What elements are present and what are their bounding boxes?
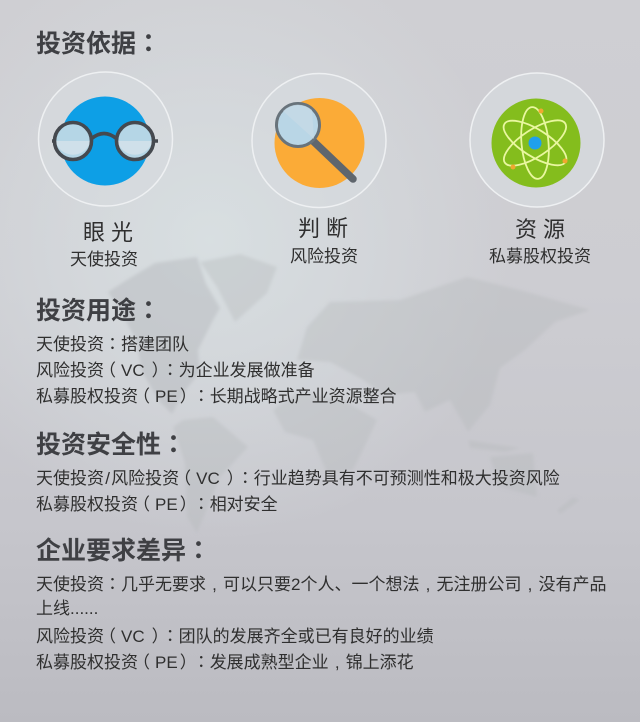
heading: use of funds: 投资用途： (36, 291, 161, 327)
text: company requirements: 天使投资：几乎无要求 可以只要2个人、一个想法 无注册公司 没有产品 (36, 570, 606, 595)
text: company requirements: , (335, 653, 340, 672)
label: vision: 眼 光 (83, 220, 133, 245)
label: judgement: 判 断 (298, 216, 348, 241)
text: use of funds: 私募股权投资（ PE）：长期战略式产业资源整合 (36, 382, 397, 407)
text: company requirements: 私募股权投资（ PE）：发展成熟型企业 锦上添花 (36, 648, 414, 673)
text: safety (36, 464, 560, 515)
label: angel investment: 天使投资 (70, 250, 138, 269)
text: company requirements: , (212, 575, 217, 594)
label: private equity: 私募股权投资 (489, 247, 591, 266)
text: safety: 天使投资/风险投资（ VC ）：行业趋势具有不可预测性和极大投资风险 (36, 464, 560, 489)
text: safety: 私募股权投资（ PE）：相对安全 (36, 490, 278, 515)
text: company requirements: 上线...... (36, 599, 98, 618)
text: company requirements: 风险投资（ VC ）：团队的发展齐全或已有良好的业绩 (36, 622, 434, 647)
heading: basis: 投资依据： (36, 24, 161, 60)
text: use of funds (36, 330, 397, 407)
label: venture capital: 风险投资 (290, 247, 358, 266)
text: company requirements: , (426, 575, 430, 594)
heading: safety: 投资安全性： (36, 425, 186, 461)
text: use of funds: 天使投资：搭建团队 (36, 330, 189, 355)
icon: glasses (38, 71, 174, 207)
text: use of funds: 风险投资（ VC ）：为企业发展做准备 (36, 356, 315, 381)
icon: atom (469, 72, 605, 208)
text: company requirements (36, 570, 606, 673)
heading: company requirements: 企业要求差异： (36, 531, 211, 567)
text: company requirements: , (528, 575, 532, 594)
icon: magnifier (251, 72, 387, 208)
label: resources: 资 源 (515, 217, 565, 242)
